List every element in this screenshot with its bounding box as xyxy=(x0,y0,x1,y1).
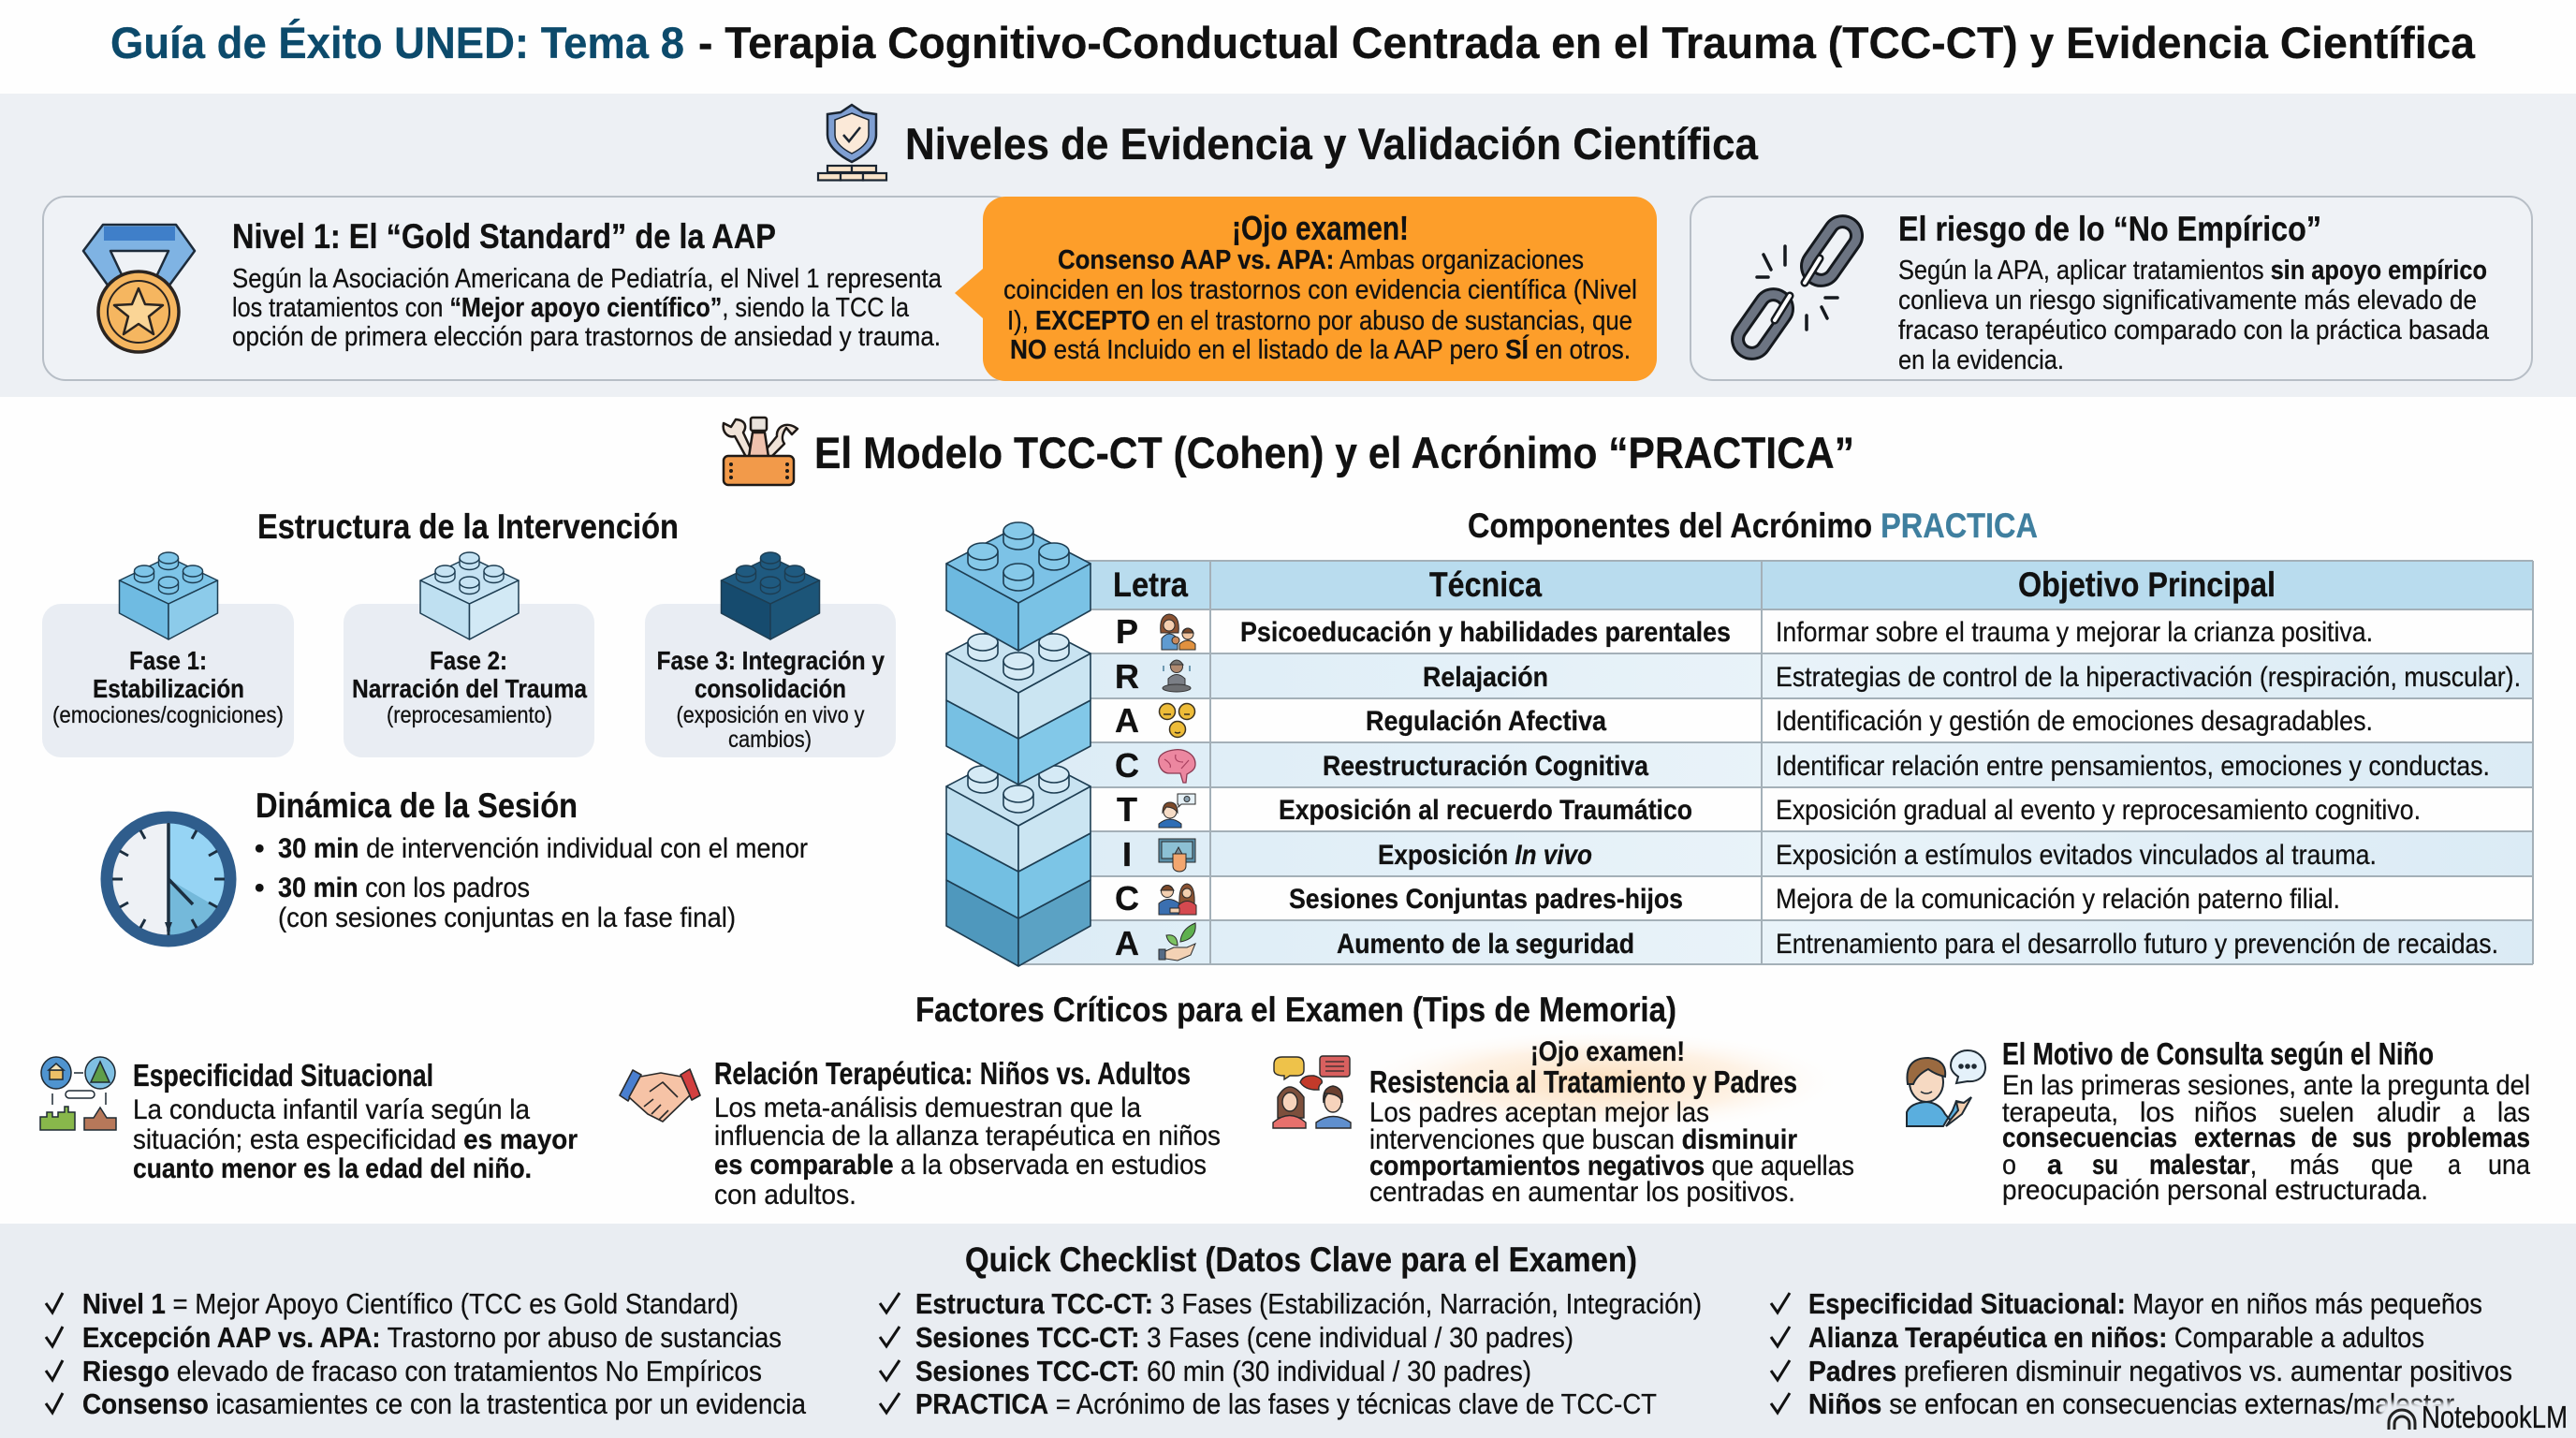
text: resistencia: comportamientos negativos que aquellas xyxy=(1369,1151,1854,1181)
column: técnicas: Psicoeducación y habilidades parentales xyxy=(1240,617,1731,648)
text: motivo: aludir xyxy=(2377,1097,2440,1128)
text: especificidad: cuanto menor es la edad del niño. xyxy=(133,1153,532,1184)
text block: riesgo: en la evidencia. xyxy=(1898,345,2064,375)
column: letras: P xyxy=(1116,612,1138,651)
text: motivo: sus xyxy=(2352,1123,2392,1153)
icon: handshake xyxy=(620,1069,700,1122)
heading: factores críticos: Factores Críticos para el Examen (Tips de Memoria) xyxy=(915,990,1676,1029)
checklist column 1: Riesgo elevado de fracaso con tratamientos No Empíricos xyxy=(82,1355,762,1387)
column: letras xyxy=(1115,612,1139,962)
text: especificidad xyxy=(133,1094,578,1184)
column: técnicas xyxy=(1240,617,1731,960)
table header xyxy=(1113,565,2276,604)
card: fase 3 xyxy=(645,552,896,757)
text: motivo: malestar, xyxy=(2149,1150,2257,1181)
heading: resistencia: Resistencia al Tratamiento y Padres xyxy=(1369,1064,1797,1099)
text: motivo: externas xyxy=(2194,1123,2296,1153)
heading: componentes: Componentes del Acrónimo PRACTICA xyxy=(1468,506,2038,545)
text: motivo: terapeuta, xyxy=(2002,1097,2118,1128)
checklist column 2 xyxy=(880,1287,1702,1420)
text: fase 3: Fase 3: Integración y xyxy=(657,646,885,675)
column: técnicas: Relajación xyxy=(1423,662,1548,693)
text: motivo: preocupación personal estructurada. xyxy=(2002,1175,2428,1206)
heading: quick checklist: Quick Checklist (Datos Clave para el Examen) xyxy=(965,1240,1637,1279)
text: motivo: las xyxy=(2497,1097,2530,1128)
text: relación xyxy=(714,1093,1221,1211)
text: fase 2: Narración del Trauma xyxy=(352,674,587,703)
table: PRACTICA xyxy=(1020,561,2533,964)
text: motivo: problemas xyxy=(2407,1123,2530,1153)
text: fase 1: (emociones/cogniciones) xyxy=(52,702,284,728)
checklist column 1: Excepción AAP vs. APA: Trastorno por abuso de sustancias xyxy=(82,1321,782,1354)
icon: broken chain xyxy=(1733,216,1862,359)
callout heading: ojo examen: ¡Ojo examen! xyxy=(1530,1036,1685,1067)
column: objetivos: Identificación y gestión de emociones desagradables. xyxy=(1776,706,2373,737)
column: letras: C xyxy=(1115,746,1139,785)
column: técnicas: Exposición al recuerdo Traumático xyxy=(1279,795,1692,826)
icon: niño con burbuja xyxy=(1907,1050,1985,1126)
icon: situaciones xyxy=(40,1057,116,1130)
column: técnicas: Exposición In vivo xyxy=(1378,840,1592,871)
text: motivo: En las primeras sesiones, ante la pregunta del xyxy=(2002,1070,2530,1101)
column: objetivos: Entrenamiento para el desarrollo futuro y prevención de recaidas. xyxy=(1776,929,2498,960)
text: motivo: los xyxy=(2140,1097,2174,1128)
checklist column 2: Estructura TCC-CT: 3 Fases (Estabilización, Narración, Integración) xyxy=(915,1287,1702,1320)
icon: mano con planta xyxy=(1159,923,1195,961)
text: fase 1 xyxy=(52,646,284,728)
column: objetivos: Exposición a estímulos evitados vinculados al trauma. xyxy=(1776,840,2377,871)
column: objetivos: Exposición gradual al evento y reprocesamiento cognitivo. xyxy=(1776,795,2421,826)
column: técnicas: Reestructuración Cognitiva xyxy=(1323,751,1648,782)
column: objetivos: Mejora de la comunicación y relación paterno filial. xyxy=(1776,884,2340,915)
callout text xyxy=(1003,245,1637,365)
text block: nivel 1: opción de primera elección para trastornos de ansiedad y trauma. xyxy=(232,322,941,352)
checklist column 3: Padres prefieren disminuir negativos vs. aumentar positivos xyxy=(1808,1355,2512,1387)
bullet list: dinámica: (con sesiones conjuntas en la fase final) xyxy=(278,902,736,933)
text: fase 3 xyxy=(657,646,885,753)
heading: estructura: Estructura de la Intervención xyxy=(257,507,679,546)
text: fase 3: cambios) xyxy=(728,726,812,753)
icon: padres e hijos xyxy=(1159,884,1196,915)
title: Guía de Éxito UNED: Tema 8 xyxy=(110,18,684,67)
heading: dinámica: Dinámica de la Sesión xyxy=(256,786,578,825)
factor: motivo de consulta xyxy=(1907,1036,2530,1206)
icon: tablet xyxy=(1159,839,1195,872)
text: motivo: su xyxy=(2092,1150,2118,1181)
text: relación: con adultos. xyxy=(714,1180,856,1211)
column: letras: I xyxy=(1122,835,1132,873)
text: relación: Los meta-análisis demuestran que la xyxy=(714,1093,1141,1123)
text: motivo: más xyxy=(2290,1150,2339,1181)
text: especificidad: La conducta infantil varía según la xyxy=(133,1094,530,1125)
column: objetivos: Identificar relación entre pensamientos, emociones y conductas. xyxy=(1776,751,2490,782)
icon: block tower xyxy=(946,522,1090,966)
text: fase 2: Fase 2: xyxy=(430,646,507,675)
column: objetivos: Informar sobre el trauma y mejorar la crianza positiva. xyxy=(1776,617,2373,648)
callout: ojo examen xyxy=(955,197,1657,381)
text block: nivel 1: los tratamientos con “Mejor apoyo científico”, siendo la TCC la xyxy=(232,293,910,323)
column: técnicas: Regulación Afectiva xyxy=(1366,706,1606,737)
text: relación: influencia de la allanza terapéutica en niños xyxy=(714,1121,1221,1152)
column: técnicas: Aumento de la seguridad xyxy=(1337,929,1634,960)
icon: toolbox xyxy=(724,418,798,485)
checklist column 3: Especificidad Situacional: Mayor en niños más pequeños xyxy=(1808,1287,2482,1320)
heading: motivo: El Motivo de Consulta según el Niño xyxy=(2002,1036,2434,1071)
bullet list: dinámica xyxy=(255,833,808,933)
section: quick checklist xyxy=(0,1224,2576,1438)
checklist column 1: Consenso icasamientes ce con la trastentica por un evidencia xyxy=(82,1387,807,1420)
column: letras: A xyxy=(1115,701,1139,740)
title: - Terapia Cognitivo-Conductual Centrada en el Trauma (TCC-CT) y Evidencia Científica xyxy=(698,18,2476,67)
text: relación: es comparable a la observada en estudios xyxy=(714,1150,1207,1181)
icon: block fase 3 xyxy=(721,552,820,639)
icon: medal xyxy=(83,225,195,352)
bullet list: dinámica: 30 min con los padros xyxy=(278,873,530,903)
text: motivo: o xyxy=(2002,1150,2016,1181)
icon: padres hablando xyxy=(1273,1056,1351,1128)
checklist column 1: Nivel 1 = Mejor Apoyo Científico (TCC es Gold Standard) xyxy=(82,1287,739,1320)
text: resistencia: Los padres aceptan mejor las xyxy=(1369,1097,1709,1128)
text block: riesgo xyxy=(1898,256,2490,375)
checklist column 2: Sesiones TCC-CT: 3 Fases (cene individual / 30 padres) xyxy=(915,1321,1573,1354)
callout text: I), EXCEPTO en el trastorno por abuso de sustancias, que xyxy=(1007,306,1632,336)
text: motivo: a xyxy=(2047,1150,2062,1181)
table header: Letra xyxy=(1113,565,1188,604)
heading: nivel 1: Nivel 1: El “Gold Standard” de la AAP xyxy=(232,217,776,256)
checklist column 3: Alianza Terapéutica en niños: Comparable a adultos xyxy=(1808,1321,2424,1354)
table header: Técnica xyxy=(1429,565,1542,604)
callout text: NO está Incluido en el listado de la AAP pero SÍ en otros. xyxy=(1010,333,1631,365)
text: fase 3: consolidación xyxy=(695,674,846,703)
text: motivo: suelen xyxy=(2279,1097,2354,1128)
callout heading: ¡Ojo examen! xyxy=(1232,209,1409,247)
text block: riesgo: fracaso terapéutico comparado con la práctica basada xyxy=(1898,315,2490,345)
callout text: Consenso AAP vs. APA: Ambas organizaciones xyxy=(1058,245,1584,275)
callout text: coinciden en los trastornos con evidencia científica (Nivel xyxy=(1003,275,1637,305)
panel: nivel 1 xyxy=(43,197,1017,380)
section heading: modelo: El Modelo TCC-CT (Cohen) y el Acrónimo “PRACTICA” xyxy=(814,428,1854,477)
icon: cerebro xyxy=(1159,750,1195,783)
icon: recuerdo xyxy=(1159,794,1195,828)
checklist column 1 xyxy=(46,1287,807,1420)
text: fase 2: (reprocesamiento) xyxy=(387,702,552,728)
text: especificidad: situación; esta especificidad es mayor xyxy=(133,1124,578,1155)
text: motivo xyxy=(2002,1070,2530,1206)
bullet list: dinámica: 30 min de intervención individual con el menor xyxy=(278,833,808,864)
factor: especificidad situacional xyxy=(40,1057,578,1184)
text: motivo: que xyxy=(2371,1150,2413,1181)
icon: shield on bricks xyxy=(818,105,886,180)
icon: emociones xyxy=(1159,704,1194,738)
column: letras: C xyxy=(1115,879,1139,917)
card: fase 1 xyxy=(42,552,294,757)
heading: riesgo: El riesgo de lo “No Empírico” xyxy=(1898,210,2321,248)
column: letras: R xyxy=(1115,657,1139,696)
card: fase 2 xyxy=(344,552,594,757)
text: fase 1: Estabilización xyxy=(93,674,244,703)
column: objetivos xyxy=(1776,617,2521,960)
heading: relación: Relación Terapéutica: Niños vs. Adultos xyxy=(714,1056,1191,1091)
text: resistencia xyxy=(1369,1097,1854,1208)
icon: meditación xyxy=(1163,660,1191,692)
text block: riesgo: conlieva un riesgo significativamente más elevado de xyxy=(1898,286,2477,315)
text: motivo: niños xyxy=(2194,1097,2257,1128)
factor: resistencia al tratamiento xyxy=(1273,1036,1854,1208)
column: técnicas: Sesiones Conjuntas padres-hijos xyxy=(1289,884,1683,915)
factor: relación terapéutica xyxy=(620,1056,1221,1211)
icon: madre e hijo xyxy=(1161,614,1195,650)
text: motivo: de xyxy=(2311,1123,2337,1153)
panel: riesgo no empírico xyxy=(1690,197,2532,380)
text: motivo: a xyxy=(2463,1097,2475,1128)
table header: Objetivo Principal xyxy=(2018,565,2276,604)
text block: riesgo: Según la APA, aplicar tratamientos sin apoyo empírico xyxy=(1898,256,2487,286)
checklist column 3: Niños se enfocan en consecuencias externas/malestar xyxy=(1808,1387,2454,1420)
text: fase 3: (exposición en vivo y xyxy=(676,702,865,728)
text: fase 1: Fase 1: xyxy=(129,646,207,675)
highlight glow xyxy=(1353,1029,1849,1134)
checklist column 2: PRACTICA = Acrónimo de las fases y técnicas clave de TCC-CT xyxy=(915,1387,1657,1420)
icon: clock xyxy=(107,817,230,941)
bullet list: dinámica: • xyxy=(255,873,265,903)
text: motivo: consecuencias xyxy=(2002,1123,2177,1153)
column: letras: T xyxy=(1117,790,1137,829)
checklist column 3 xyxy=(1771,1287,2512,1420)
text: motivo: una xyxy=(2488,1150,2530,1181)
icon: block fase 1 xyxy=(120,552,217,639)
text: fase 2 xyxy=(352,646,587,728)
section heading: niveles: Niveles de Evidencia y Validación Científica xyxy=(905,119,1759,169)
icon: block fase 2 xyxy=(420,552,519,639)
heading: especificidad: Especificidad Situacional xyxy=(133,1058,433,1093)
text: motivo: a xyxy=(2448,1150,2461,1181)
text: resistencia: centradas en aumentar los positivos. xyxy=(1369,1177,1795,1208)
bullet list: dinámica: • xyxy=(255,833,265,864)
text: resistencia: intervenciones que buscan disminuir xyxy=(1369,1124,1797,1155)
text block: nivel 1 xyxy=(232,264,943,352)
text block: nivel 1: Según la Asociación Americana de Pediatría, el Nivel 1 representa xyxy=(232,264,943,294)
column: letras: A xyxy=(1115,924,1139,962)
checklist column 2: Sesiones TCC-CT: 60 min (30 individual / 30 padres) xyxy=(915,1355,1531,1387)
